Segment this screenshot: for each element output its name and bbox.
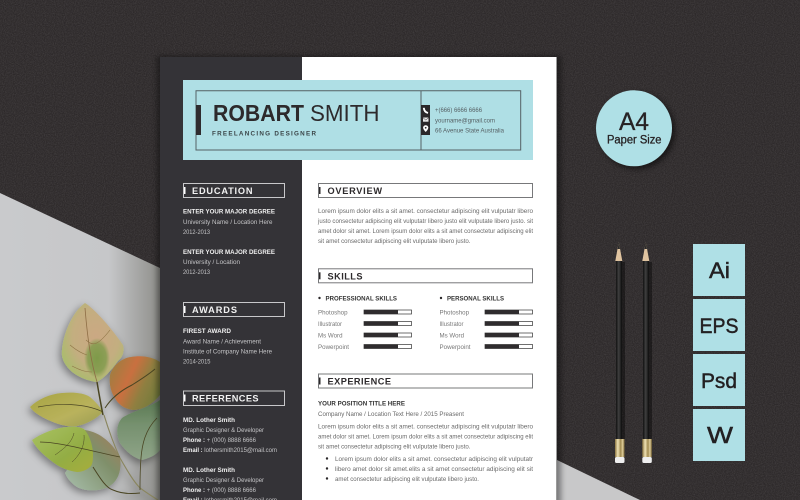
contact details: 66 Avenue State Australia xyxy=(435,127,504,134)
overview paragraph: Lorem ipsum dolor elits a sit amet. consectetur adipiscing elit vulputatr libero xyxy=(318,208,533,215)
white main column xyxy=(302,57,557,500)
education entries: ENTER YOUR MAJOR DEGREE xyxy=(183,208,276,216)
header band xyxy=(183,80,533,160)
awards entries: 2014-2015 xyxy=(183,358,211,366)
header frame xyxy=(196,91,521,150)
skills: personal column: Photoshop xyxy=(440,310,469,316)
education entries: University / Location xyxy=(183,259,240,266)
format tile: EPS: EPS xyxy=(700,315,738,338)
experience entry: YOUR POSITION TITLE HERE xyxy=(318,400,405,408)
experience entry: amet dolor sit amet. Lorem ipsum dolor elits a sit amet consectetur adipiscing elit xyxy=(318,433,533,440)
badge: A4 paper size: Paper Size xyxy=(607,134,662,146)
main heading: experience xyxy=(318,374,532,388)
skill bars: personal xyxy=(485,310,532,348)
skills: professional column: Powerpoint xyxy=(318,344,349,351)
experience entry: sit amet consectetur adipiscing elit vulputate libero justo. xyxy=(318,443,471,450)
main heading: overview xyxy=(318,184,532,198)
leaf top: green blotch xyxy=(84,338,110,378)
format tile: W: W xyxy=(707,422,733,448)
sheet right edge xyxy=(556,57,557,500)
education entries: 2012-2013 xyxy=(183,229,210,236)
overview paragraph: justo consectetur adipiscing elit vulputatr libero justo elit vulputate libero justo. sit xyxy=(317,218,533,225)
references entries: Graphic Designer & Developer xyxy=(183,477,265,484)
skills: professional column: Illustrator xyxy=(318,321,343,328)
skills: personal column: Powerpoint xyxy=(440,344,471,351)
experience bullets: Lorem ipsum dolor elits a sit amet. consectetur adipiscing elit vulputatr xyxy=(335,456,534,463)
main heading: overview: OVERVIEW xyxy=(328,186,382,196)
education entries: 2012-2013 xyxy=(183,269,210,276)
badge: A4 paper size: A4 xyxy=(619,108,649,136)
skills: professional column xyxy=(318,296,412,351)
skill bars: professional xyxy=(364,310,412,348)
dark sidebar xyxy=(160,57,302,500)
pencil left xyxy=(615,242,625,463)
experience entry: Lorem ipsum dolor elits a sit amet. consectetur adipiscing elit vulputatr libero xyxy=(318,423,533,430)
stems and veins xyxy=(38,308,158,500)
sidebar heading: references: REFERENCES xyxy=(192,394,258,404)
sheet shadow xyxy=(157,56,561,500)
references entries: MD. Lother Smith xyxy=(183,417,235,424)
overview paragraph: amet dolor sit amet. Lorem ipsum dolor elits a sit amet consectetur adipiscing elit xyxy=(318,228,533,235)
experience bullets: libero amet dolor sit amet.elits a sit amet consectetur adipiscing elit sit xyxy=(335,466,533,473)
references entries: Phone : + (000) 8888 6666 xyxy=(183,437,256,444)
leaf: orange xyxy=(110,356,160,410)
sidebar heading: awards xyxy=(184,302,284,316)
references entries: Email : lothersmith2015@mail.com xyxy=(183,447,277,454)
sidebar heading: education: EDUCATION xyxy=(192,186,253,196)
references entries: MD. Lother Smith xyxy=(183,467,235,474)
main heading: skills xyxy=(318,269,532,283)
references entries: Graphic Designer & Developer xyxy=(183,427,265,434)
education entries: University Name / Location Here xyxy=(183,219,273,226)
format tile: Psd: Psd xyxy=(701,370,737,393)
contact icons xyxy=(421,105,430,135)
leaf: back teal xyxy=(65,430,120,490)
header band: SMITH xyxy=(310,100,380,126)
awards entries: FIREST AWARD xyxy=(183,328,231,335)
contact details xyxy=(435,107,504,134)
sidebar heading: education xyxy=(184,184,284,198)
format tile: W xyxy=(693,409,745,461)
references entries: Phone : + (000) 8888 6666 xyxy=(183,487,256,494)
awards entries xyxy=(183,328,272,366)
experience bullets: amet consectetur adipiscing elit vulputate libero justo. xyxy=(335,476,479,483)
name accent bar xyxy=(196,105,201,135)
references entries xyxy=(183,417,277,500)
skills: personal column xyxy=(440,296,532,351)
format tile: EPS xyxy=(693,299,745,351)
experience bullets xyxy=(326,456,534,483)
name: ROBART xyxy=(213,100,304,126)
pencil right xyxy=(642,242,652,463)
sidebar heading: awards: AWARDS xyxy=(192,305,237,315)
overview paragraph: sit amet consectetur adipiscing elit vulputate libero justo. xyxy=(318,238,471,245)
main heading: skills: SKILLS xyxy=(328,272,362,282)
leaf: bright green xyxy=(32,427,93,472)
grey diagonal surface xyxy=(0,193,160,500)
awards entries: Institute of Company Name Here xyxy=(183,348,272,356)
skills: professional column: Photoshop xyxy=(318,310,348,316)
illustration: watercolor leaves xyxy=(30,303,160,500)
format tile: Ai: Ai xyxy=(709,258,730,283)
resume sheet xyxy=(157,56,561,500)
job title: FREELANCING DESIGNER xyxy=(212,131,316,138)
leaf: right grey-green xyxy=(117,400,160,460)
skills: personal column: Ms Word xyxy=(440,332,464,340)
education entries xyxy=(183,208,276,276)
main heading: experience: EXPERIENCE xyxy=(328,377,391,387)
format tile: Psd xyxy=(693,354,745,406)
leaf: yellow left xyxy=(30,393,103,426)
skills: professional column: Ms Word xyxy=(318,332,343,340)
experience entry: Company Name / Location Text Here / 2015 Preasent xyxy=(318,411,464,418)
skills: personal column: PERSONAL SKILLS xyxy=(447,296,504,303)
leaf: top xyxy=(62,303,124,382)
grey corner right of the resume xyxy=(557,460,640,500)
contact details: +(666) 6666 6666 xyxy=(435,107,482,114)
skills: professional column: PROFESSIONAL SKILLS xyxy=(326,296,397,303)
awards entries: Award Name / Achievement xyxy=(183,338,261,346)
badge: A4 paper size xyxy=(596,90,675,169)
experience entry xyxy=(318,400,534,483)
education entries: ENTER YOUR MAJOR DEGREE xyxy=(183,249,276,256)
overview paragraph xyxy=(317,208,533,245)
skills: personal column: Illustrator xyxy=(440,321,464,328)
contact details: yourname@gmail.com xyxy=(435,117,495,124)
sidebar heading: references xyxy=(184,391,284,406)
format tile: Ai xyxy=(693,244,745,296)
